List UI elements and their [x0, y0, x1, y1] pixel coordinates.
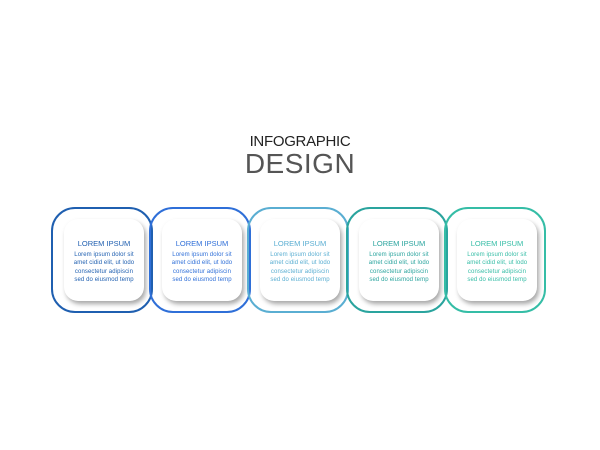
step 5: amet cidid elit, ut lodo — [467, 260, 527, 266]
step 4: Lorem ipsum dolor sit — [369, 252, 429, 258]
step 1 — [51, 207, 153, 313]
step 3: sed do eiusmod temp — [270, 277, 330, 283]
step 2: consectetur adipiscin — [173, 269, 231, 275]
step 4: consectetur adipiscin — [370, 269, 428, 275]
step 5: sed do eiusmod temp — [467, 277, 527, 283]
step 3 — [247, 207, 349, 313]
step 3: consectetur adipiscin — [271, 269, 329, 275]
step 4: amet cidid elit, ut lodo — [369, 260, 429, 266]
step 1: LOREM IPSUM — [78, 239, 130, 248]
step 4 — [346, 207, 448, 313]
step 1: sed do eiusmod temp — [74, 277, 134, 283]
title: INFOGRAPHIC — [250, 133, 350, 150]
step 1: amet cidid elit, ut lodo — [74, 260, 134, 266]
step 5 — [444, 207, 546, 313]
step 5: LOREM IPSUM — [471, 239, 523, 248]
step 2: amet cidid elit, ut lodo — [172, 260, 232, 266]
step 2: sed do eiusmod temp — [172, 277, 232, 283]
step 5: consectetur adipiscin — [468, 269, 526, 275]
step 5: Lorem ipsum dolor sit — [467, 252, 527, 258]
step 3: amet cidid elit, ut lodo — [270, 260, 330, 266]
step 2: Lorem ipsum dolor sit — [172, 252, 232, 258]
step 2 — [149, 207, 251, 313]
step 4: LOREM IPSUM — [373, 239, 425, 248]
step 1: Lorem ipsum dolor sit — [74, 252, 134, 258]
step 4: sed do eiusmod temp — [369, 277, 429, 283]
subtitle: DESIGN — [245, 148, 355, 179]
step 3: LOREM IPSUM — [274, 239, 326, 248]
step 1: consectetur adipiscin — [75, 269, 133, 275]
step 3: Lorem ipsum dolor sit — [270, 252, 330, 258]
step 2: LOREM IPSUM — [176, 239, 228, 248]
